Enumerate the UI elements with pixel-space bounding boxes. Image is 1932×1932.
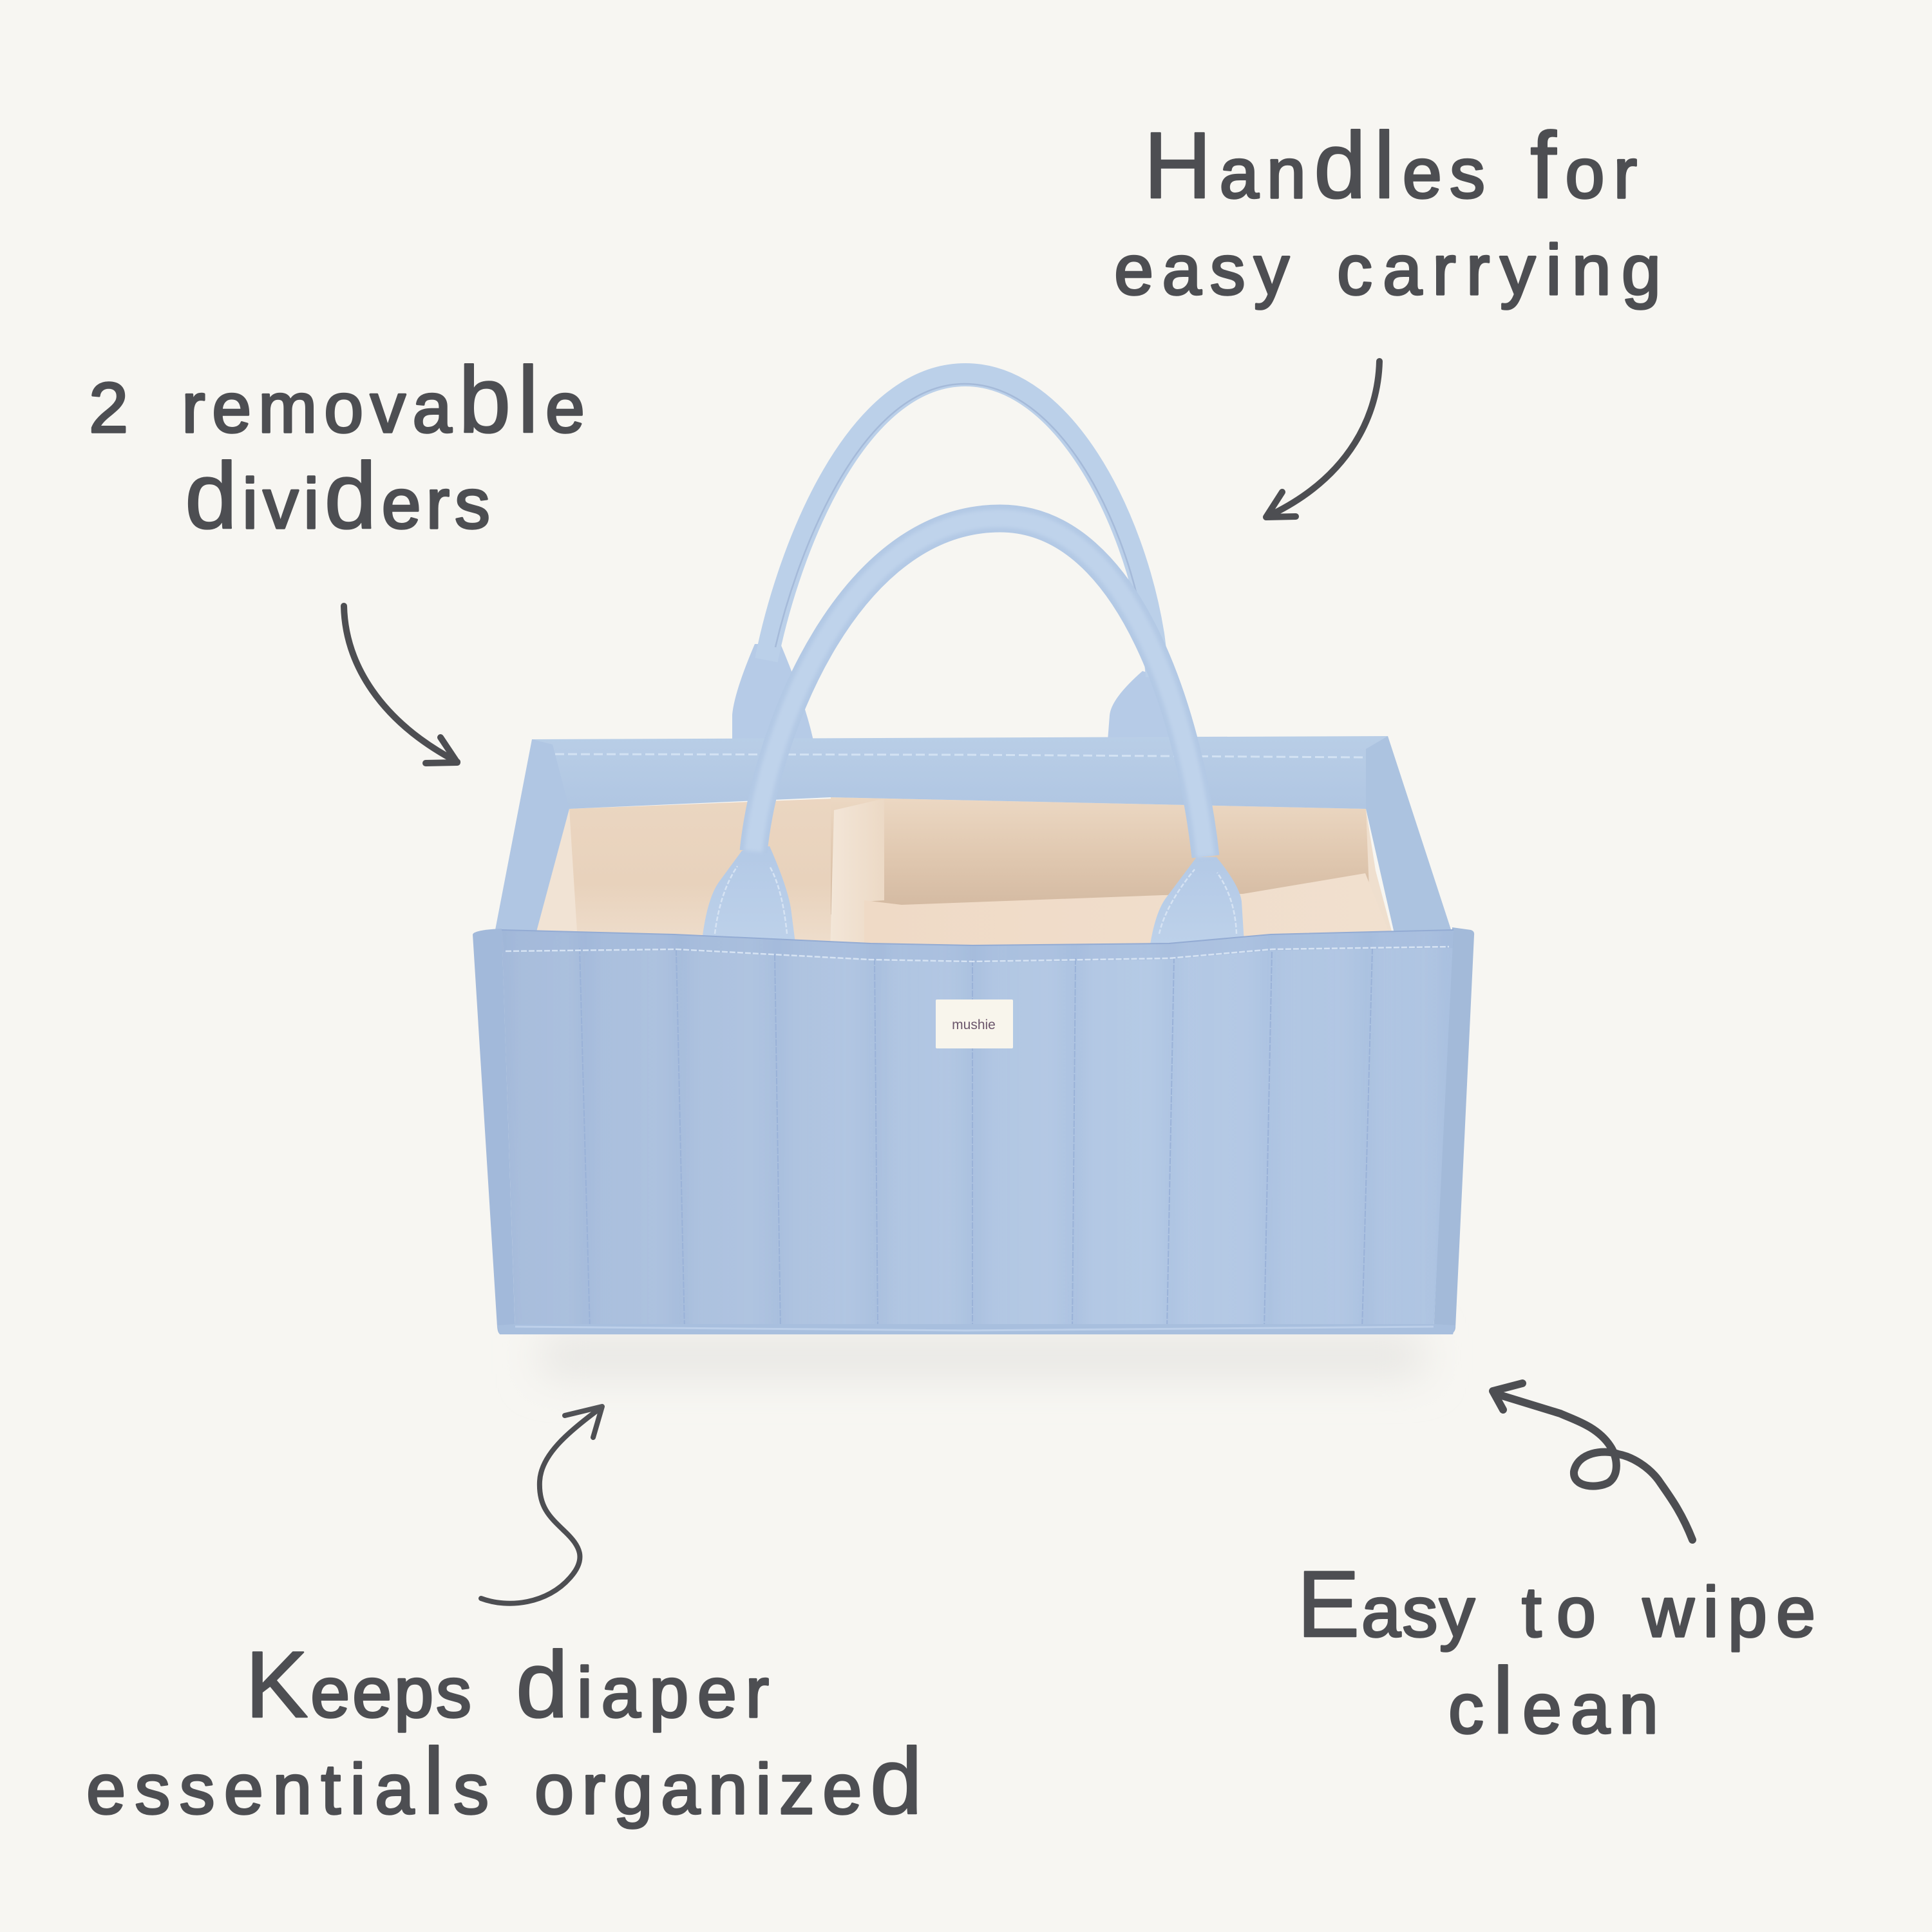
callout: keeps diaper essentials organized	[86, 1632, 922, 1833]
top edge line	[502, 930, 1454, 945]
arrow: dividers	[344, 606, 457, 763]
quilted channels	[502, 927, 1452, 1336]
top band	[502, 930, 1454, 963]
front handle tabs	[701, 846, 1245, 953]
callout: handles for easy carrying: easy	[1114, 231, 1289, 310]
interior lining: left compartment	[528, 799, 834, 953]
left side wall	[491, 739, 569, 953]
callout: handles for easy carrying	[1114, 113, 1661, 310]
arrow: wipe clean	[1493, 1383, 1692, 1540]
front handle	[753, 518, 1206, 857]
bottom binding highlight	[515, 1327, 1434, 1331]
back handle tabs	[732, 644, 1179, 741]
quilt stitching	[580, 948, 1372, 1331]
interior side lining right	[1366, 809, 1397, 953]
front panel	[502, 930, 1454, 1333]
callout: keeps diaper essentials organized: diaper	[516, 1632, 769, 1737]
side flap right	[1434, 927, 1474, 1334]
infographic canvas	[88, 129, 1814, 1830]
callout: easy to wipe clean: clean	[1448, 1648, 1658, 1753]
callout: easy to wipe clean	[1297, 1551, 1815, 1753]
removable divider: vertical	[830, 799, 884, 953]
tab stitching	[715, 866, 1236, 934]
callout: 2 removable dividers: removable	[182, 347, 585, 452]
side flap left	[473, 929, 515, 1334]
product: diaper caddy bag	[473, 375, 1474, 1375]
interior side lining left	[532, 809, 577, 931]
arrow: organized	[481, 1406, 602, 1604]
callout: 2 removable dividers: dividers	[185, 443, 490, 548]
top stitching	[506, 947, 1449, 961]
callout: keeps diaper essentials organized: essentials	[86, 1728, 489, 1833]
interior lining: right compartment	[831, 797, 1376, 914]
right side wall	[1366, 736, 1459, 953]
callout: 2 removable dividers	[89, 347, 585, 548]
arrow: handles	[1266, 361, 1379, 517]
callout: easy to wipe clean: to	[1522, 1573, 1596, 1652]
brand label	[936, 999, 1013, 1048]
callout: handles for easy carrying: Handles	[1144, 113, 1485, 218]
back handle	[766, 375, 1157, 676]
removable divider: horizontal	[864, 873, 1397, 953]
callout: easy to wipe clean: Easy	[1297, 1551, 1475, 1656]
bottom binding	[497, 1324, 1455, 1334]
callout: keeps diaper essentials organized: organized	[535, 1728, 922, 1833]
brand label: mushie	[952, 1018, 996, 1032]
back wall stitching	[555, 754, 1364, 757]
shadow under bag	[541, 1336, 1423, 1375]
callout: handles for easy carrying: for	[1530, 113, 1637, 218]
callout: handles for easy carrying: carrying	[1337, 231, 1661, 310]
back wall band	[532, 736, 1388, 809]
callout: keeps diaper essentials organized: Keeps	[245, 1632, 471, 1737]
callout: easy to wipe clean: wipe	[1642, 1573, 1815, 1652]
callout: 2 removable dividers: 2	[89, 368, 128, 448]
